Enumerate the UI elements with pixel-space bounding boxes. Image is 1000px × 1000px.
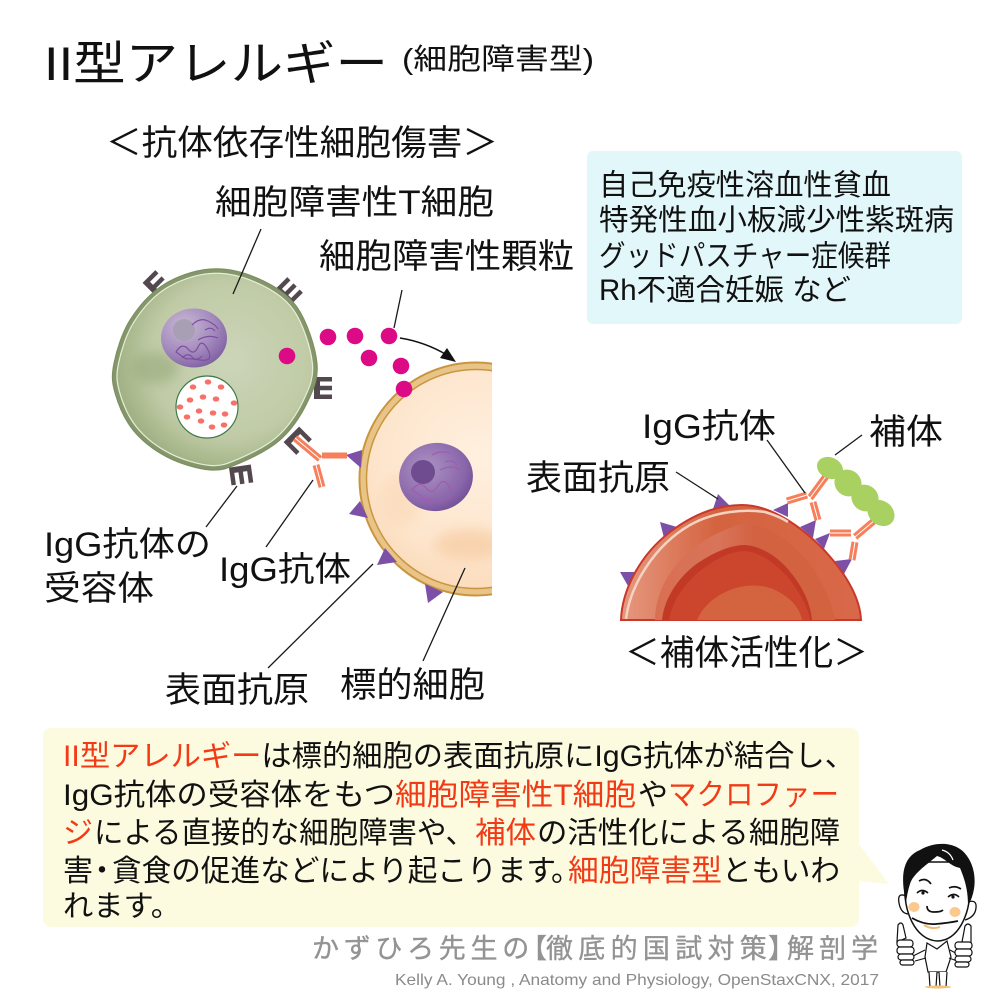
label: IgG receptor: IgG抗体の xyxy=(44,526,211,564)
antibody 1 xyxy=(787,475,827,520)
panel: explanation callout: 害 xyxy=(63,855,93,888)
panel: explanation callout: 補体 xyxy=(475,817,536,850)
panel: explanation callout: IgG抗体の受容体をもつ xyxy=(63,779,395,812)
arrow: granules to target cell xyxy=(400,338,456,362)
cytotoxic granules xyxy=(279,328,412,397)
icon: doctor character xyxy=(897,844,976,988)
IgG antibody bridging cells xyxy=(295,438,347,487)
cell body xyxy=(112,269,317,470)
footer: brand: 徹底的国試対策 xyxy=(546,934,772,964)
panel: explanation callout: による直接的な細胞障害や、 xyxy=(94,817,475,850)
leader lines left xyxy=(206,229,465,668)
label: surface antigen right: 表面抗原 xyxy=(526,459,670,498)
eyes, nose and mouth xyxy=(912,880,961,924)
ears xyxy=(899,895,976,920)
target cell nucleus xyxy=(399,442,473,512)
target cell xyxy=(358,362,492,596)
cheeks xyxy=(908,902,960,917)
panel: explanation callout xyxy=(43,728,889,927)
label: complement: 補体 xyxy=(869,413,943,452)
arms xyxy=(913,950,961,962)
panel: explanation callout: れます。 xyxy=(63,890,181,923)
panel: explanation callout: や xyxy=(638,779,668,812)
panel: explanation callout: 細胞障害型 xyxy=(568,855,722,888)
cytotoxic T cell xyxy=(112,269,332,485)
label: IgG antibody right: IgG抗体 xyxy=(642,408,776,446)
label: cytotoxic T cell: 細胞障害性T細胞 xyxy=(215,184,494,222)
hair xyxy=(903,844,975,906)
red blood cell with complement xyxy=(620,453,900,620)
panel: disease list: 特発性血小板減少性紫斑病 xyxy=(599,204,954,237)
panel: disease list xyxy=(587,151,962,324)
surface antigens on target cell xyxy=(346,450,443,603)
left thumb-up fist xyxy=(897,923,914,965)
panel: explanation callout: ジ xyxy=(63,817,93,850)
panel: explanation callout: 貪食の促進などにより起こります xyxy=(112,855,556,888)
footer: credit: Kelly A. Young , Anatomy and Physiology, OpenStaxCNX, 2017 xyxy=(395,972,879,989)
footer: brand: かずひろ先生の xyxy=(312,934,534,964)
label: target cell: 標的細胞 xyxy=(340,666,485,705)
label: IgG antibody: IgG抗体 xyxy=(219,551,351,589)
subtitle: (細胞障害型) xyxy=(402,43,594,76)
receptors on T cell xyxy=(143,270,332,485)
right thumb-up fist xyxy=(955,924,972,967)
antigens on red cell xyxy=(620,494,852,586)
panel: disease list: Rh不適合妊娠 など xyxy=(599,274,851,307)
panel: explanation callout: ともいわ xyxy=(722,855,840,888)
leader lines right xyxy=(676,435,862,499)
label: surface antigen: 表面抗原 xyxy=(165,671,309,710)
label: IgG receptor xyxy=(44,526,211,608)
label: cytotoxic granules: 細胞障害性顆粒 xyxy=(319,238,574,276)
complement xyxy=(813,453,900,532)
vesicle with granules xyxy=(176,376,238,438)
footer: brand: 】 xyxy=(768,934,795,964)
heading: antibody-dependent cellular cytotoxicity: ＜抗体依存性細胞傷害＞ xyxy=(106,124,498,163)
label: IgG receptor: 受容体 xyxy=(44,570,154,608)
panel: explanation callout: ・ xyxy=(87,855,117,888)
footer: brand: 【 xyxy=(520,934,547,964)
heading: complement activation: ＜補体活性化＞ xyxy=(625,634,868,673)
panel: explanation callout: 。 xyxy=(551,855,581,888)
red cell body xyxy=(621,505,861,620)
panel: explanation callout: マクロファー xyxy=(668,779,839,812)
T cell nucleus xyxy=(161,308,227,368)
panel: disease list: グッドパスチャー症候群 xyxy=(599,240,891,273)
antibody 2 xyxy=(830,520,875,560)
body xyxy=(925,941,951,972)
face xyxy=(905,862,970,941)
panel: explanation callout: II型アレルギーは標的細胞の表面抗原にIgG抗体が結合し、 xyxy=(63,740,855,773)
panel: explanation callout: 細胞障害性T細胞 xyxy=(395,779,636,812)
footer: brand xyxy=(312,934,883,964)
legs xyxy=(929,972,947,987)
title: II型アレルギー xyxy=(44,37,388,90)
panel: explanation callout: の活性化による細胞障 xyxy=(537,817,840,850)
footer: brand: 解剖学 xyxy=(787,934,883,964)
panel: disease list: 自己免疫性溶血性貧血 xyxy=(599,169,891,202)
